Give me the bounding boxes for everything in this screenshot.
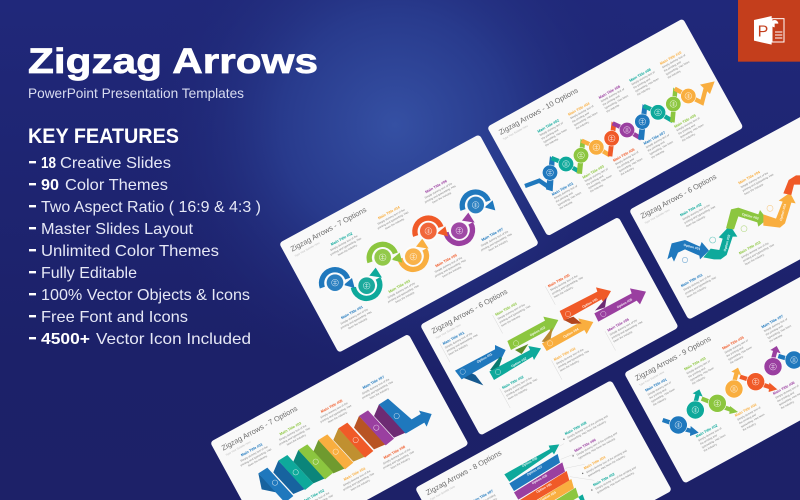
slide: Zigzag Arrows 10 Options: Main Title #07	[643, 131, 666, 146]
slide: Zigzag Arrows 6 Options flat arrows: Simply dummy text of the	[444, 331, 473, 349]
slide: Zigzag Arrows 7 Options folded ribbon: printing and typesetting. Has	[342, 471, 375, 492]
slide: Zigzag Arrows 9 Options: Type Your Subtitle Here	[638, 370, 665, 387]
slide: Zigzag Arrows 6 Options rising arrows: printing and typesetting. Has	[742, 172, 775, 193]
slide: Zigzag Arrows 7 Options circles: been the industry.	[442, 265, 463, 278]
slide: Zigzag Arrows 6 Options rising arrows: been the industry.	[744, 252, 765, 266]
slide: Zigzag Arrows 10 Options: the printing and	[663, 60, 682, 73]
slide: Zigzag Arrows 7 Options circles	[279, 134, 539, 353]
slide: Zigzag Arrows 10 Options: the printing and	[571, 111, 590, 124]
slide: Zigzag Arrows 6 Options flat arrows: printing and typesetting. Has	[551, 275, 584, 295]
slide: Zigzag Arrows 10 Options: the industry.	[575, 120, 590, 130]
slide: Zigzag Arrows 6 Options flat arrows: been the industry.	[613, 329, 634, 343]
slide: Zigzag Arrows 7 Options folded ribbon: Zigzag Arrows - 7 Options	[220, 404, 299, 452]
zigzag flat arrows: Option #01	[476, 352, 493, 364]
slide: Zigzag Arrows 10 Options: typesetting. Has been	[649, 139, 674, 156]
subtitle: PowerPoint Presentation Templates	[28, 85, 244, 101]
slide: Zigzag Arrows 9 Options: Zigzag Arrows - 9 Options	[633, 334, 713, 383]
stacked option ribbons	[504, 444, 594, 500]
slide: Zigzag Arrows 7 Options folded ribbon	[210, 334, 469, 500]
slide: Zigzag Arrows 7 Options folded ribbon: Simply dummy text of the	[361, 377, 390, 396]
slide: Zigzag Arrows 10 Options: Main Title #08	[629, 68, 652, 83]
slide: Zigzag Arrows 9 Options: typesetting. Has been	[740, 412, 766, 429]
slide: Zigzag Arrows 10 Options: typesetting. Has been	[679, 122, 705, 139]
icon: PowerPoint badge: P	[758, 24, 768, 41]
slide: Zigzag Arrows 7 Options circles: Type Your Subtitle Here	[294, 241, 321, 258]
slide: Zigzag Arrows 10 Options: the printing and	[647, 140, 666, 153]
slide: Zigzag Arrows 10 Options: typesetting. Has been	[587, 173, 613, 190]
slide: Zigzag Arrows 9 Options: the printing and	[687, 366, 706, 379]
slide: Zigzag Arrows 8 Options: Zigzag Arrows - 8 Options	[424, 448, 503, 497]
slide: Zigzag Arrows 7 Options folded ribbon: been the industry.	[390, 456, 411, 470]
slide: Zigzag Arrows 9 Options: typesetting. Has been	[727, 345, 753, 361]
slide: Zigzag Arrows 6 Options flat arrows: Main Title #01	[442, 331, 465, 346]
slide: Zigzag Arrows 10 Options: Main Title #09	[674, 114, 697, 129]
slide: Zigzag Arrows 6 Options rising arrows: Simply dummy text of the	[740, 171, 769, 189]
slide: Zigzag Arrows 10 Options: typesetting. Has been	[634, 76, 660, 93]
slide: Zigzag Arrows 10 Options: Simply dummy text of	[600, 87, 625, 103]
slide: Zigzag Arrows 6 Options flat arrows: Type Your Subtitle Here	[435, 323, 462, 340]
slide: Zigzag Arrows 6 Options rising arrows: printing and typesetting. Has	[684, 275, 717, 295]
slide: Zigzag Arrows 6 Options rising arrows: printing and typesetting. Has	[742, 242, 775, 263]
slide: Zigzag Arrows 8 Options	[415, 380, 672, 500]
rising ribbon arrows: Option #04	[779, 203, 787, 221]
slide: Zigzag Arrows 6 Options flat arrows: Simply dummy text of the	[555, 347, 585, 366]
slide: Zigzag Arrows 10 Options: the industry.	[559, 200, 574, 210]
slide: Zigzag Arrows 7 Options folded ribbon: printing and typesetting. Has	[361, 379, 394, 400]
slide: Zigzag Arrows 10 Options: the industry.	[636, 86, 651, 96]
slide: Zigzag Arrows 10 Options: typesetting. Has been	[573, 110, 599, 127]
slide: Zigzag Arrows 6 Options rising arrows: been the industry.	[743, 182, 765, 196]
slide: Zigzag Arrows 6 Options flat arrows: Main Title #05	[547, 273, 570, 288]
slide: Zigzag Arrows 9 Options: Main Title #04	[734, 402, 758, 418]
slide: Zigzag Arrows 7 Options circles: Simply dummy text of the	[480, 229, 509, 248]
slide: Zigzag Arrows 6 Options flat arrows: been the industry.	[553, 285, 574, 299]
slide: Zigzag Arrows 9 Options: Main Title #05	[722, 336, 745, 351]
slide: Zigzag Arrows 7 Options circles: Main Title #02	[330, 232, 353, 247]
feature list: Fully Editable	[41, 265, 137, 282]
slide: Zigzag Arrows 10 Options: Simply dummy text of	[584, 167, 609, 183]
slide: Zigzag Arrows 7 Options circles: Simply dummy text of the	[434, 255, 463, 274]
slide: Zigzag Arrows 10 Options: Main Title #06	[598, 85, 621, 100]
slide: Zigzag Arrows 6 Options flat arrows: Main Title #02	[501, 375, 524, 390]
slide: Zigzag Arrows 9 Options: Simply dummy text of	[697, 426, 722, 442]
slide: Zigzag Arrows 7 Options circles: Main Title #04	[377, 205, 401, 220]
slide: Zigzag Arrows 8 Options: Main Title #08	[564, 421, 587, 436]
stacked option ribbons: Option #06	[531, 473, 548, 485]
slide: Zigzag Arrows 10 Options: Main Title #05	[612, 148, 635, 163]
slide: Zigzag Arrows 7 Options folded ribbon: printing and typesetting. Has	[382, 449, 415, 470]
slide: Zigzag Arrows 7 Options circles: Zigzag Arrows - 7 Options	[289, 205, 368, 253]
slide: Zigzag Arrows 10 Options: Main Title #04	[567, 101, 591, 117]
slide: Zigzag Arrows 6 Options rising arrows: printing and typesetting. Has	[683, 204, 717, 225]
rising ribbon arrows: Option #01	[683, 243, 701, 251]
slide: Zigzag Arrows 7 Options circles: been the industry.	[432, 190, 453, 204]
zigzag flat arrows: Option #04	[562, 327, 579, 339]
slide: Zigzag Arrows 6 Options rising arrows	[629, 101, 800, 320]
slide: Zigzag Arrows 9 Options: Simply dummy text of	[763, 317, 788, 333]
slide: Zigzag Arrows 10 Options: the industry.	[606, 103, 621, 113]
slide: Zigzag Arrows 8 Options: Main Title #04	[583, 455, 607, 470]
slide: Zigzag Arrows 10 Options: typesetting. Has been	[542, 127, 568, 144]
feature list: 18	[41, 155, 56, 172]
slide: Zigzag Arrows 7 Options circles: been the industry.	[384, 217, 405, 231]
slide: Zigzag Arrows 6 Options rising arrows: Simply dummy text of the	[682, 203, 711, 221]
slide: Zigzag Arrows 6 Options flat arrows: been the industry.	[448, 342, 469, 356]
slide: Zigzag Arrows 9 Options: the printing and	[738, 412, 757, 425]
stacked option ribbons: Option #05	[535, 482, 552, 494]
feature list: Free Font and Icons	[41, 309, 188, 326]
slide: Zigzag Arrows 9 Options: Main Title #07	[761, 314, 784, 329]
slide: Zigzag Arrows 10 Options: the printing and	[555, 191, 574, 204]
slide: Zigzag Arrows 7 Options folded ribbon: printing and typesetting. Has	[320, 403, 353, 424]
folded zigzag ribbon arrow	[258, 399, 432, 500]
slide: Zigzag Arrows 7 Options circles: Main Title #03	[388, 279, 411, 294]
slide: Zigzag Arrows 9 Options: typesetting. Has been	[701, 433, 727, 449]
slide: Zigzag Arrows 6 Options rising arrows: been the industry.	[686, 285, 707, 299]
slide: Zigzag Arrows 9 Options: Main Title #06	[772, 381, 795, 396]
slide: Zigzag Arrows 7 Options circles: been the industry.	[395, 290, 416, 304]
slide: Zigzag Arrows 10 Options: typesetting. Has been	[604, 93, 629, 110]
rising ribbon arrows	[667, 175, 800, 263]
slide: Zigzag Arrows 7 Options folded ribbon: Main Title #06	[383, 445, 406, 460]
slide: Zigzag Arrows 9 Options: Simply dummy text of	[686, 359, 711, 375]
slide: Zigzag Arrows 9 Options: the printing and	[776, 390, 795, 403]
slide: Zigzag Arrows 10 Options: Simply dummy text of	[614, 150, 639, 166]
slide: Zigzag Arrows 7 Options folded ribbon: been the industry.	[247, 454, 268, 468]
slide: Zigzag Arrows 9 Options: typesetting. Has been	[767, 323, 792, 340]
slide: Zigzag Arrows 10 Options	[487, 18, 744, 236]
slide: Zigzag Arrows 10 Options: the industry.	[681, 132, 696, 142]
slide: Zigzag Arrows 7 Options circles: printing and typesetting. Has	[329, 236, 363, 256]
slide: Zigzag Arrows 9 Options: Simply dummy text of	[774, 384, 800, 400]
slide: Zigzag Arrows 7 Options circles: been the industry.	[347, 316, 369, 330]
slide: Zigzag Arrows 9 Options: the industry.	[652, 396, 667, 407]
zigzag flat arrows	[455, 287, 646, 385]
slide: Zigzag Arrows 10 Options: typesetting. Has been	[618, 156, 644, 173]
slide: Zigzag Arrows 10 Options: typesetting. Has been	[665, 59, 691, 76]
slide: Zigzag Arrows 10 Options: the printing and	[677, 123, 696, 136]
slide: Zigzag Arrows 9 Options: Main Title #02	[695, 424, 718, 439]
slide: Zigzag Arrows 10 Options: Type Your Subtitle Here	[502, 124, 529, 141]
slide: Zigzag Arrows 9 Options: the printing and	[726, 345, 744, 358]
slide: Zigzag Arrows 10 Options: the industry.	[620, 166, 635, 176]
slide: Zigzag Arrows 7 Options folded ribbon: Main Title #01	[240, 442, 263, 457]
slide: Zigzag Arrows 8 Options: typesetting. Has been the industry.	[587, 454, 626, 478]
slide: Zigzag Arrows 6 Options flat arrows: printing and typesetting. Has	[505, 377, 538, 397]
feature list: Color Themes	[65, 177, 168, 194]
slide: Zigzag Arrows 6 Options flat arrows: printing and typesetting. Has	[611, 319, 644, 340]
slide: Zigzag Arrows 10 Options: Main Title #03	[582, 165, 605, 180]
slide: Zigzag Arrows 7 Options circles: Main Title #05	[435, 253, 458, 268]
slide: Zigzag Arrows 10 Options: the printing and	[541, 128, 560, 141]
slide: Zigzag Arrows 8 Options: Simply dummy text of the printing and	[594, 465, 637, 491]
feature list: 90	[41, 177, 59, 194]
zigzag flat arrows: Option #02	[510, 356, 527, 368]
slide: Zigzag Arrows 6 Options flat arrows: Main Title #04	[553, 346, 577, 362]
slide: Zigzag Arrows 6 Options flat arrows: Simply dummy text of the	[549, 274, 579, 292]
slide: Zigzag Arrows 7 Options folded ribbon: printing and typesetting. Has	[278, 426, 311, 446]
slide: Zigzag Arrows 7 Options folded ribbon: Main Title #04	[343, 466, 367, 482]
slide: Zigzag Arrows 6 Options flat arrows: Main Title #06	[607, 318, 630, 333]
zigzag flat arrows: Option #06	[616, 297, 633, 309]
heading: key features: KEY FEATURES	[28, 125, 179, 148]
slide: Zigzag Arrows 7 Options circles: printing and typesetting. Has	[480, 232, 513, 252]
slide: Zigzag Arrows 9 Options: the industry.	[742, 421, 757, 432]
feature list: Two Aspect Ratio ( 16:9 & 4:3 )	[41, 199, 261, 216]
slide: Zigzag Arrows 7 Options circles: printing and typesetting. Has	[424, 184, 457, 204]
slide: Zigzag Arrows 10 Options: the industry.	[667, 69, 682, 80]
feature list: Vector Icon Included	[96, 331, 251, 348]
slide: Zigzag Arrows 7 Options folded ribbon: Simply dummy text of the	[382, 447, 412, 465]
slide: Zigzag Arrows 10 Options: Simply dummy text of	[675, 116, 701, 132]
slide: Zigzag Arrows 6 Options flat arrows: printing and typesetting. Has	[499, 304, 532, 324]
rising ribbon arrows: Option #03	[741, 212, 759, 221]
slide: Zigzag Arrows 6 Options flat arrows: been the industry.	[507, 387, 528, 401]
slide: Zigzag Arrows 8 Options: typesetting. Has been the industry.	[577, 436, 617, 460]
slide: Zigzag Arrows 10 Options: the printing and	[616, 157, 635, 170]
slide: Zigzag Arrows 8 Options: typesetting. Has been the industry.	[596, 470, 635, 494]
slide: Zigzag Arrows 10 Options: Main Title #10	[659, 51, 682, 66]
slide: Zigzag Arrows 8 Options: Main Title #06	[574, 438, 597, 453]
slide: Zigzag Arrows 6 Options flat arrows: been the industry.	[559, 359, 580, 373]
slide: Zigzag Arrows 9 Options: Main Title #01	[645, 378, 668, 393]
rising ribbon arrows: Option #02	[723, 234, 731, 252]
slide: Zigzag Arrows 6 Options rising arrows: Main Title #01	[680, 273, 703, 288]
feature list: Unlimited Color Themes	[41, 243, 219, 260]
serpentine circular arrows	[322, 192, 495, 298]
slide: Zigzag Arrows 9 Options: the industry.	[703, 442, 718, 453]
slide: Zigzag Arrows 9 Options: the industry.	[780, 399, 795, 410]
slide: Zigzag Arrows 9 Options: the printing and	[765, 324, 784, 337]
slide: Zigzag Arrows 9 Options: Main Title #03	[684, 356, 707, 371]
slide: Zigzag Arrows 10 Options: Simply dummy text of	[539, 121, 564, 137]
slide: Zigzag Arrows 8 Options: Main Title #02	[592, 472, 615, 487]
slide: Zigzag Arrows 7 Options circles: Main Title #07	[481, 227, 504, 242]
slide: Zigzag Arrows 10 Options: the industry.	[544, 137, 559, 147]
slide: Zigzag Arrows 7 Options circles: Main Title #01	[340, 305, 364, 320]
slide: Zigzag Arrows 6 Options flat arrows: printing and typesetting. Has	[446, 332, 479, 353]
slide: Zigzag Arrows 10 Options: Zigzag Arrows - 10 Options	[497, 86, 580, 137]
slide: Zigzag Arrows 9 Options	[624, 265, 800, 484]
slide: Zigzag Arrows 10 Options: Main Title #02	[537, 119, 560, 134]
slide: Zigzag Arrows 7 Options folded ribbon: printing and typesetting. Has	[240, 447, 273, 467]
slide: Zigzag Arrows 7 Options folded ribbon: been the industry.	[350, 478, 371, 492]
stacked option ribbons: Option #07	[526, 465, 543, 477]
slide: Zigzag Arrows 10 Options: the printing and	[586, 174, 604, 187]
feature list: 100% Vector Objects & Icons	[41, 287, 250, 304]
slide: Zigzag Arrows 9 Options: Simply dummy text of	[647, 380, 672, 397]
slide: Zigzag Arrows 6 Options flat arrows: Main Title #03	[495, 302, 518, 317]
slide: Zigzag Arrows 10 Options: the printing and	[602, 94, 621, 107]
slide: Zigzag Arrows 7 Options folded ribbon: Main Title #07	[362, 375, 385, 390]
slide: Zigzag Arrows 7 Options circles: Simply dummy text of the	[424, 181, 453, 200]
slide: Zigzag Arrows 9 Options: typesetting. Has been	[650, 387, 676, 403]
slide: Zigzag Arrows 7 Options folded ribbon: Type Your Subtitle Here	[225, 440, 252, 457]
slide: Zigzag Arrows 10 Options: Simply dummy text of	[661, 53, 686, 69]
title: Zigzag Arrows	[28, 42, 318, 81]
slide: Zigzag Arrows 7 Options circles: Simply dummy text of the	[340, 307, 369, 326]
slide: Zigzag Arrows 6 Options rising arrows: Simply dummy text of the	[682, 273, 712, 292]
slide: Zigzag Arrows 10 Options: typesetting. Has been	[557, 190, 582, 207]
slide: Zigzag Arrows 10 Options: the printing and	[632, 77, 651, 90]
slide: Zigzag Arrows 9 Options: the printing and	[699, 433, 718, 446]
slide: Zigzag Arrows 10 Options: the industry.	[589, 183, 604, 193]
slide: Zigzag Arrows 9 Options: Simply dummy text of	[736, 405, 762, 422]
slide: Zigzag Arrows 6 Options flat arrows: Simply dummy text of the	[503, 375, 533, 394]
feature list: Master Slides Layout	[41, 221, 194, 238]
slide: Zigzag Arrows 8 Options: Simply dummy text of the printing and	[566, 414, 609, 440]
slide: Zigzag Arrows 6 Options rising arrows: been the industry.	[685, 214, 706, 228]
slide: Zigzag Arrows 7 Options circles: Main Title #06	[425, 179, 448, 194]
slide: Zigzag Arrows 6 Options rising arrows: Main Title #02	[679, 202, 703, 217]
circle nodes with arrows	[663, 346, 800, 436]
stacked option ribbons: Option #08	[521, 456, 538, 468]
feature list: Creative Slides	[60, 155, 171, 172]
slide: Zigzag Arrows 6 Options flat arrows	[420, 217, 679, 436]
slide: Zigzag Arrows 7 Options circles: Simply dummy text of the	[329, 234, 359, 252]
slide: Zigzag Arrows 7 Options circles: been the industry.	[337, 243, 358, 257]
slide: Zigzag Arrows 7 Options circles: printing and typesetting. Has	[434, 258, 467, 278]
slide: Zigzag Arrows 6 Options rising arrows: Simply dummy text of the	[740, 241, 770, 259]
slide: Zigzag Arrows 6 Options flat arrows: printing and typesetting. Has	[557, 349, 590, 369]
slide: Zigzag Arrows 10 Options: Simply dummy text of	[645, 133, 670, 149]
feature list: 4500+	[41, 331, 90, 348]
slide: Zigzag Arrows 7 Options folded ribbon: Simply dummy text of the	[342, 469, 372, 487]
slide: Zigzag Arrows 10 Options: the industry.	[651, 149, 666, 159]
icon: PowerPoint badge	[738, 0, 800, 62]
slide: Zigzag Arrows 9 Options: the printing and	[649, 387, 667, 400]
slide: Zigzag Arrows 9 Options: the industry.	[691, 375, 706, 386]
slide: Zigzag Arrows 7 Options circles: printing and typesetting. Has	[387, 283, 420, 304]
feature list	[29, 155, 261, 348]
slide: Zigzag Arrows 7 Options folded ribbon: Main Title #03	[279, 421, 302, 436]
slide: Zigzag Arrows 6 Options rising arrows: Type Your Subtitle Here	[644, 208, 671, 225]
slide: Zigzag Arrows 9 Options: typesetting. Has been	[689, 366, 715, 382]
slide: Zigzag Arrows 10 Options: Main Title #01	[551, 182, 574, 197]
slide: Zigzag Arrows 8 Options: Simply dummy text of the printing and	[576, 431, 618, 457]
slide: Zigzag Arrows 6 Options rising arrows: Main Title #03	[738, 240, 761, 255]
slide: Zigzag Arrows 6 Options flat arrows: Simply dummy text of the	[609, 318, 638, 336]
slide: Zigzag Arrows 6 Options rising arrows: Main Title #04	[738, 170, 762, 185]
slide: Zigzag Arrows 7 Options circles: printing and typesetting. Has	[377, 210, 410, 230]
slide: Zigzag Arrows 10 Options: Simply dummy text of	[569, 104, 594, 120]
slide: Zigzag Arrows 7 Options circles: Simply dummy text of the	[377, 207, 406, 226]
slide: Zigzag Arrows 7 Options folded ribbon: been the industry.	[286, 433, 307, 447]
slide: Zigzag Arrows 7 Options folded ribbon: Simply dummy text of the	[319, 401, 349, 419]
slide: Zigzag Arrows 6 Options flat arrows: Simply dummy text of the	[497, 302, 526, 321]
slide: Zigzag Arrows 6 Options rising arrows: Zigzag Arrows - 6 Options	[639, 172, 718, 220]
zigzag flat arrows: Option #05	[581, 297, 598, 309]
slide: Zigzag Arrows 7 Options folded ribbon: Main Title #05	[320, 399, 343, 414]
slide: Zigzag Arrows 10 Options: Simply dummy text of	[553, 184, 578, 200]
slide: Zigzag Arrows 7 Options folded ribbon: Simply dummy text of the	[278, 423, 308, 442]
slide: Zigzag Arrows 7 Options folded ribbon: been the industry.	[369, 386, 390, 400]
slide: Zigzag Arrows 10 Options: Simply dummy text of	[631, 70, 656, 86]
slide: Zigzag Arrows 9 Options: the industry.	[769, 333, 784, 343]
slide: Zigzag Arrows 6 Options flat arrows: Zigzag Arrows - 6 Options	[430, 287, 509, 335]
slide: Zigzag Arrows 7 Options folded ribbon: been the industry.	[327, 410, 348, 424]
slide: Zigzag Arrows 9 Options: Simply dummy text of	[724, 338, 749, 355]
slide: Zigzag Arrows 7 Options circles: been the industry.	[488, 238, 509, 252]
zigzag arrow with ten nodes	[525, 81, 715, 191]
slide: Zigzag Arrows 7 Options circles: printing and typesetting. Has	[340, 309, 373, 330]
zigzag flat arrows: Option #03	[529, 325, 546, 337]
slide: Zigzag Arrows 6 Options flat arrows: been the industry.	[500, 314, 522, 328]
slide: Zigzag Arrows 7 Options folded ribbon: Simply dummy text of the	[239, 444, 269, 463]
slide: Zigzag Arrows 8 Options: typesetting. Has been the industry.	[568, 419, 607, 443]
slide: Zigzag Arrows 8 Options: Simply dummy text of the printing and	[585, 448, 628, 474]
slide: Zigzag Arrows 7 Options circles: Simply dummy text of the	[387, 281, 416, 299]
slide: Zigzag Arrows 9 Options: the industry.	[729, 354, 744, 365]
